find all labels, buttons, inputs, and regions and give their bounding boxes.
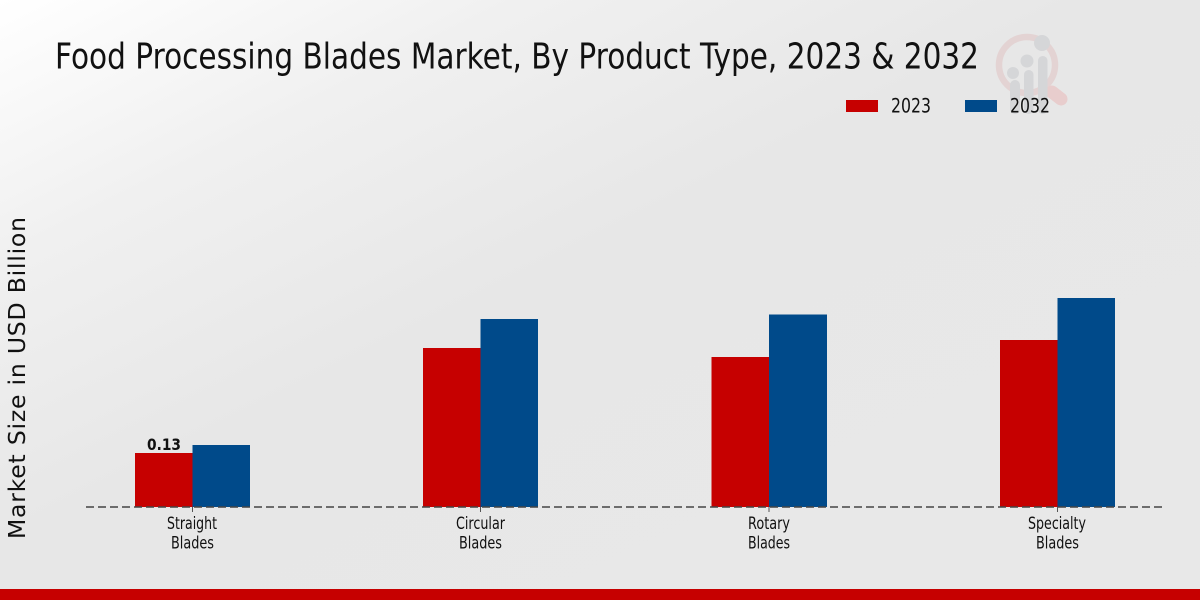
bars: Straight Blades xyxy=(135,445,250,507)
x-axis label: Straight Blades: Straight xyxy=(167,514,217,533)
x-axis label: Specialty Blades xyxy=(1028,514,1086,552)
bars: Rotary Blades xyxy=(712,314,827,507)
bars: Circular Blades xyxy=(423,319,538,507)
legend: 2032 xyxy=(965,94,1050,118)
legend xyxy=(846,94,1050,118)
x-axis label: Rotary Blades: Blades xyxy=(748,534,790,552)
footer bar xyxy=(0,589,1200,600)
x-axis label: Specialty Blades: Specialty xyxy=(1028,514,1086,533)
x-axis label: Specialty Blades: Blades xyxy=(1036,534,1079,552)
bars: Specialty Blades xyxy=(1000,298,1115,507)
title: Food Processing Blades Market, By Product Type, 2023 & 2032 xyxy=(55,36,979,78)
legend: 2032: 2032 xyxy=(1010,94,1050,118)
watermark logo xyxy=(999,35,1061,114)
x-axis label: Circular Blades: Blades xyxy=(459,534,502,552)
x-axis label: Circular Blades: Circular xyxy=(456,514,505,533)
legend: 2023 xyxy=(846,94,931,118)
x-axis label: Rotary Blades: Rotary xyxy=(748,514,790,533)
x-axis label: Circular Blades xyxy=(456,514,505,552)
x-axis label: Rotary Blades xyxy=(748,514,790,552)
x-axis label: Straight Blades xyxy=(167,514,217,552)
x-axis label: Straight Blades: Blades xyxy=(171,534,214,552)
y-axis label: Market Size in USD Billion xyxy=(3,217,31,539)
data label: 0.13 xyxy=(147,435,181,454)
bar chart xyxy=(86,298,1164,512)
legend: 2023: 2023 xyxy=(891,94,931,118)
